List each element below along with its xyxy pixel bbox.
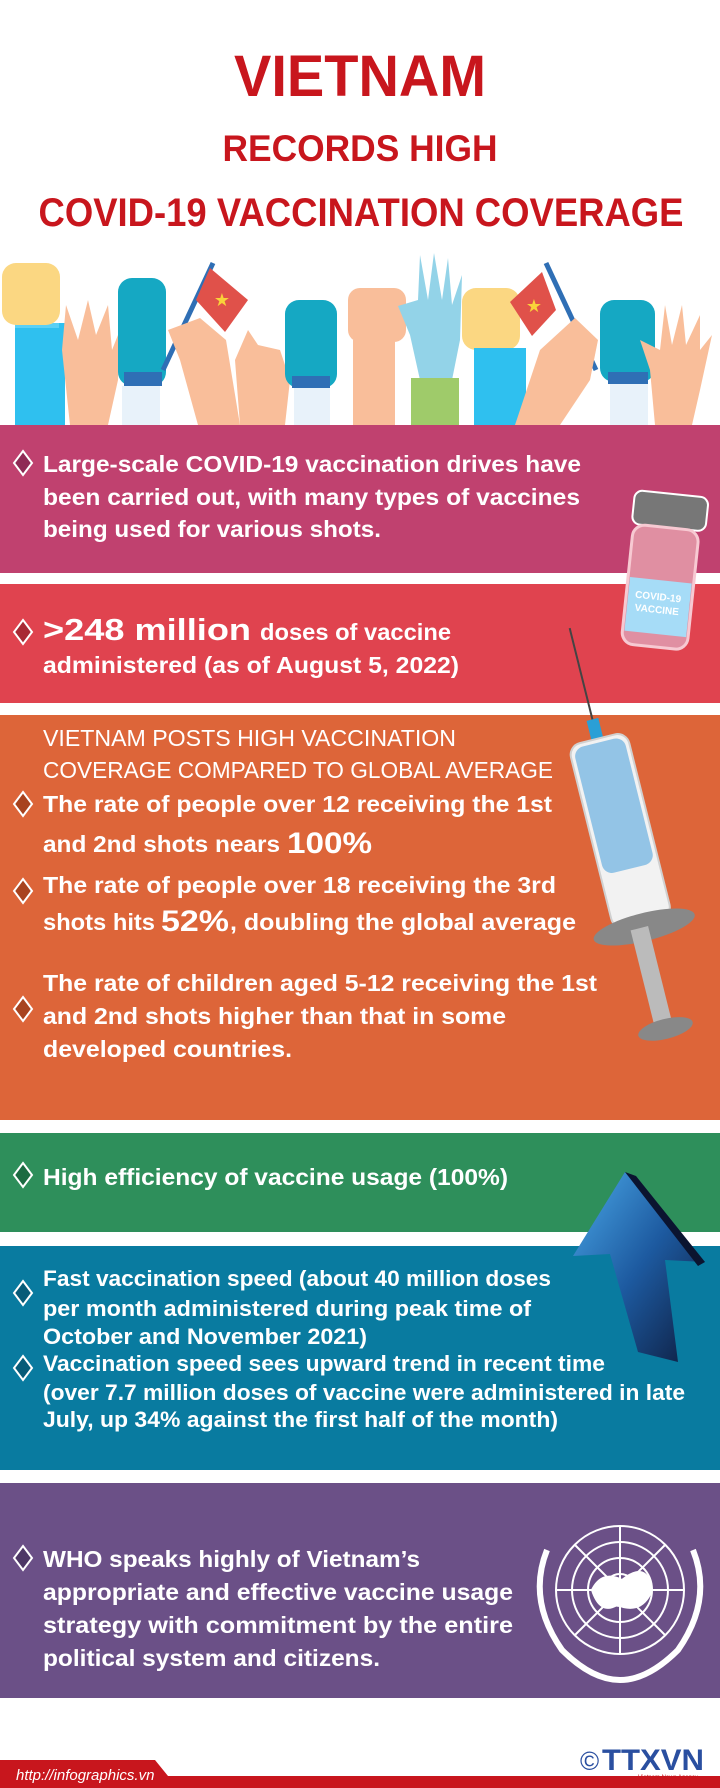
panel: coverage vs global: and 2nd shots higher than that in some (43, 1003, 506, 1029)
panel: coverage vs global: 100% (287, 827, 372, 860)
subheading: VIETNAM POSTS HIGH VACCINATION (43, 725, 456, 751)
panel: large-scale drives: Large-scale COVID-19 vaccination drives have (43, 451, 581, 477)
subheading: COVERAGE COMPARED TO GLOBAL AVERAGE (43, 757, 553, 783)
panel: coverage vs global: shots hits (43, 909, 155, 935)
panel: WHO: strategy with commitment by the entire (43, 1612, 513, 1638)
logo: TTXVN: © (580, 1746, 599, 1776)
panel: doses administered: >248 million (43, 612, 251, 647)
panel: efficiency (0, 1133, 720, 1232)
subheading (43, 725, 553, 783)
illustration: raised hands: ★ (526, 296, 542, 316)
icon: vaccine vial (619, 490, 709, 651)
icon: 3D up arrow (573, 1172, 705, 1362)
panel: coverage vs global (0, 715, 720, 1120)
panel: doses administered: doses of vaccine (260, 619, 451, 645)
panel: large-scale drives (0, 425, 720, 573)
icon: UN emblem (540, 1526, 700, 1680)
panel: WHO: appropriate and effective vaccine usage (43, 1579, 513, 1605)
panel: large-scale drives: been carried out, with many types of vaccines (43, 484, 580, 510)
icon: vaccine vial: COVID-19 (635, 590, 682, 605)
illustration: raised hands: ★ (214, 290, 230, 310)
panel: vaccination speed: (over 7.7 million doses of vaccine were administered in late (43, 1380, 685, 1405)
panel: coverage vs global: The rate of children aged 5-12 receiving the 1st (43, 970, 597, 996)
panel: doses administered: administered (as of August 5, 2022) (43, 652, 459, 678)
panel: vaccination speed (0, 1246, 720, 1470)
title: RECORDS HIGH (222, 128, 498, 169)
panel: coverage vs global: 52% (161, 905, 229, 938)
icon: syringe (519, 616, 720, 1050)
panel: WHO: WHO speaks highly of Vietnam’s (43, 1546, 420, 1572)
panel: coverage vs global: The rate of people over 12 receiving the 1st (43, 791, 552, 817)
logo: TTXVN: Vietnam News Agency (638, 1775, 698, 1781)
panel: WHO (0, 1483, 720, 1698)
panel: coverage vs global: , doubling the global average (230, 909, 576, 935)
panel: vaccination speed: October and November 2021) (43, 1324, 367, 1349)
title: VIETNAM (234, 44, 486, 109)
panel: vaccination speed: July, up 34% against the first half of the month) (43, 1407, 558, 1432)
panel: coverage vs global: developed countries. (43, 1036, 292, 1062)
panel: vaccination speed: Vaccination speed sees upward trend in recent time (43, 1351, 605, 1376)
panel: coverage vs global: The rate of people over 18 receiving the 3rd (43, 872, 556, 898)
panel: vaccination speed: per month administered during peak time of (43, 1296, 532, 1321)
footer: website tab: http://infographics.vn (16, 1767, 154, 1784)
panel: large-scale drives: being used for various shots. (43, 516, 381, 542)
panel: vaccination speed: Fast vaccination speed (about 40 million doses (43, 1266, 551, 1291)
panel: doses administered (0, 584, 720, 703)
icon: diamond bullet (14, 451, 32, 475)
logo: TTXVN: TTXVN (602, 1744, 704, 1777)
title (38, 44, 684, 235)
panel: efficiency: High efficiency of vaccine usage (100%) (43, 1164, 508, 1190)
illustration: raised hands (2, 253, 712, 425)
icon: vaccine vial: VACCINE (634, 603, 680, 618)
footer: website tab (0, 1760, 720, 1788)
icon: diamond bullet (14, 620, 32, 644)
panel: coverage vs global: and 2nd shots nears (43, 831, 280, 857)
panel: WHO: political system and citizens. (43, 1645, 380, 1671)
